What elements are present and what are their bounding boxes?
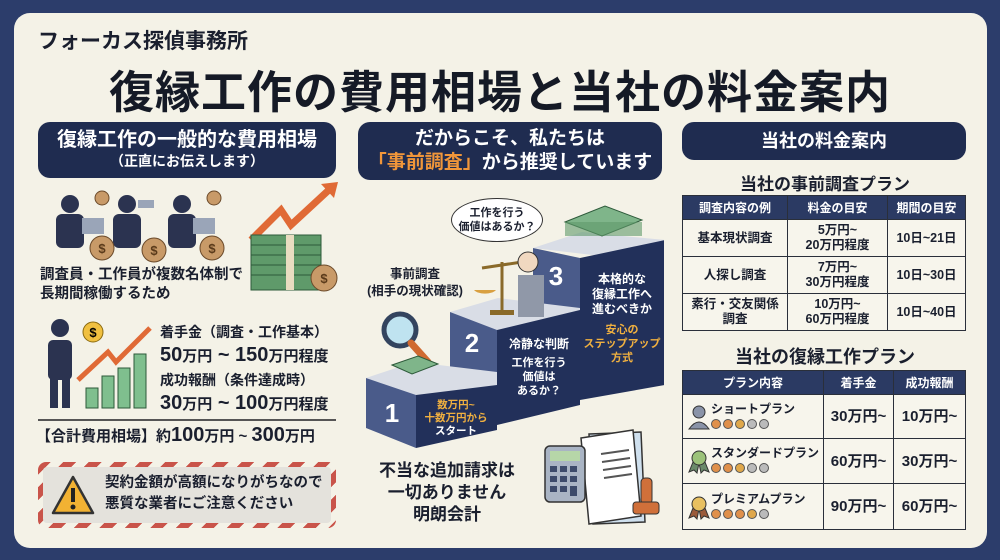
- table: pre-investigation plans: 素行・交友関係: [691, 297, 779, 311]
- text: pre-investigation label: 事前調査: [390, 267, 440, 281]
- icon: money stack with arrow: [248, 182, 338, 292]
- text: transparent pricing: [379, 461, 515, 524]
- chart: three-step stairs: 2: [465, 328, 479, 358]
- text: transparent pricing: 明朗会計: [413, 505, 481, 524]
- table: reconciliation plans: 30万円~: [831, 408, 886, 425]
- table: pre-investigation plans: 10日~21日: [896, 230, 957, 244]
- heading: our pricing: 当社の料金案内: [761, 131, 887, 151]
- chart: three-step stairs: 3: [549, 261, 563, 291]
- callout: thought bubble: 価値はあるか？: [458, 221, 536, 233]
- table: reconciliation plans: 10万円~: [902, 408, 957, 425]
- scale and man: [500, 262, 504, 312]
- text: upfront and success fees: 着手金（調査・工作基本）: [160, 324, 328, 340]
- table: pre-investigation plans: 調査内容の例: [699, 201, 771, 215]
- icon: warning triangle: [52, 476, 94, 514]
- table: pre-investigation plans: 5万円~: [818, 223, 857, 237]
- callout: thought bubble: 工作を行う: [470, 207, 524, 219]
- table: reconciliation plans: ショートプラン: [711, 402, 795, 416]
- chart: three-step stairs: 冷静な判断: [509, 336, 569, 351]
- table: pre-investigation plans: 10日~30日: [896, 268, 957, 282]
- heading: recommend pre-investigation: [358, 122, 662, 180]
- chart: three-step stairs: スタート: [435, 425, 477, 437]
- callout: warning: [38, 462, 336, 528]
- heading: general cost: （正直にお伝えします）: [110, 153, 264, 169]
- table: reconciliation plans: 着手金: [840, 376, 876, 390]
- text: transparent pricing: 不当な追加請求は: [379, 461, 515, 480]
- callout: thought bubble: [451, 198, 543, 242]
- step 1: [366, 362, 497, 396]
- chart: three-step stairs: 数万円~: [437, 398, 475, 411]
- table: pre-investigation plans: 10万円~: [814, 297, 861, 311]
- table: reconciliation plans: スタンダードプラン: [711, 446, 819, 460]
- table: pre-investigation plans: 60万円程度: [806, 312, 869, 326]
- table: pre-investigation plans: 7万円~: [818, 260, 857, 274]
- chart: three-step stairs: 工作を行う: [512, 355, 566, 369]
- text: total cost: 【合計費用相場】約100万円 ~ 300万円: [36, 424, 315, 446]
- chart: three-step stairs: 方式: [611, 350, 633, 364]
- table: reconciliation plans: プレミアムプラン: [711, 492, 805, 506]
- chart: three-step stairs: ステップアップ: [584, 337, 660, 350]
- heading: general cost: [38, 122, 336, 178]
- chart: three-step stairs: あるか？: [517, 384, 561, 397]
- text: pre-investigation label: [367, 267, 463, 298]
- icon: investigators with money bags: [56, 190, 224, 262]
- callout: warning: 契約金額が高額になりがちなので: [105, 475, 322, 491]
- panel: left general cost: [36, 122, 338, 528]
- table: pre-investigation plans: 基本現状調査: [697, 230, 772, 244]
- table: pre-investigation plans: 10日~40日: [896, 304, 957, 318]
- text: upfront and success fees: 30万円 ~ 100万円程度: [160, 392, 328, 414]
- title: 復縁工作の費用相場と当社の料金案内: [109, 67, 891, 118]
- table: pre-investigation plans: 期間の目安: [896, 201, 956, 215]
- icon: investigators with money bags: $: [208, 241, 216, 256]
- text: reason: 調査員・工作員が複数名体制で: [40, 267, 243, 283]
- icon: calculator and documents: [544, 429, 660, 525]
- table: reconciliation plans: 成功報酬: [905, 376, 954, 390]
- table: pre-investigation plans: 調査: [722, 312, 748, 326]
- magnifier: [384, 314, 416, 346]
- text: upfront and success fees: 50万円 ~ 150万円程度: [160, 344, 328, 366]
- text: upfront and success fees: 成功報酬（条件達成時）: [160, 372, 314, 388]
- table: pre-investigation plans: 20万円程度: [806, 238, 869, 252]
- table: reconciliation plans: 60万円~: [902, 498, 957, 515]
- heading: general cost: 復縁工作の一般的な費用相場: [57, 129, 317, 151]
- text: upfront and success fees: [160, 324, 328, 414]
- step 2: [450, 298, 580, 332]
- chart: three-step stairs: 十数万円から: [424, 411, 488, 424]
- heading: pre-investigation plan: 当社の事前調査プラン: [740, 175, 910, 194]
- chart: three-step stairs: 安心の: [606, 322, 638, 336]
- heading: recommend pre-investigation: 「事前調査」から推奨しています: [368, 152, 652, 173]
- chart: three-step stairs: 1: [385, 398, 399, 428]
- icon: money stack with arrow: $: [320, 271, 328, 286]
- panel: right pricing: [682, 122, 966, 530]
- heading: our pricing: [682, 122, 966, 160]
- icon: businessman with growth chart: $: [89, 325, 97, 340]
- chart: three-step stairs: [366, 206, 664, 448]
- table: reconciliation plans: プラン内容: [723, 376, 783, 390]
- chart: three-step stairs: 本格的な: [598, 271, 646, 286]
- table: pre-investigation plans: 30万円程度: [806, 275, 869, 289]
- text: reason: [40, 266, 243, 302]
- table: pre-investigation plans: [682, 195, 966, 331]
- table: reconciliation plans: 60万円~: [831, 452, 886, 470]
- heading: reconciliation plan: 当社の復縁工作プラン: [735, 347, 915, 367]
- text: transparent pricing: 一切ありません: [388, 483, 506, 502]
- chart: three-step stairs: 価値は: [522, 369, 556, 383]
- money on step 3: [565, 206, 642, 236]
- text: pre-investigation label: (相手の現状確認): [367, 284, 463, 298]
- panel: middle recommendation: [358, 122, 664, 525]
- table: reconciliation plans: 30万円~: [902, 452, 957, 470]
- heading: recommend pre-investigation: だからこそ、私たちは: [415, 128, 605, 149]
- icon: investigators with money bags: $: [150, 243, 158, 258]
- text: reason: 長期間稼働するため: [40, 286, 170, 302]
- callout: warning: 悪質な業者にご注意ください: [105, 496, 293, 512]
- table: pre-investigation plans: 料金の目安: [807, 201, 868, 215]
- icon: businessman with growth chart: [48, 319, 152, 408]
- step 3: [533, 232, 665, 258]
- chart: three-step stairs: 復縁工作へ: [592, 286, 652, 301]
- table: reconciliation plans: [682, 370, 966, 530]
- subtitle: company: フォーカス探偵事務所: [38, 30, 248, 53]
- table: pre-investigation plans: 人探し調査: [704, 268, 766, 282]
- table: reconciliation plans: 90万円~: [831, 498, 886, 515]
- icon: investigators with money bags: $: [98, 241, 106, 256]
- chart: three-step stairs: 進むべきか: [592, 301, 652, 316]
